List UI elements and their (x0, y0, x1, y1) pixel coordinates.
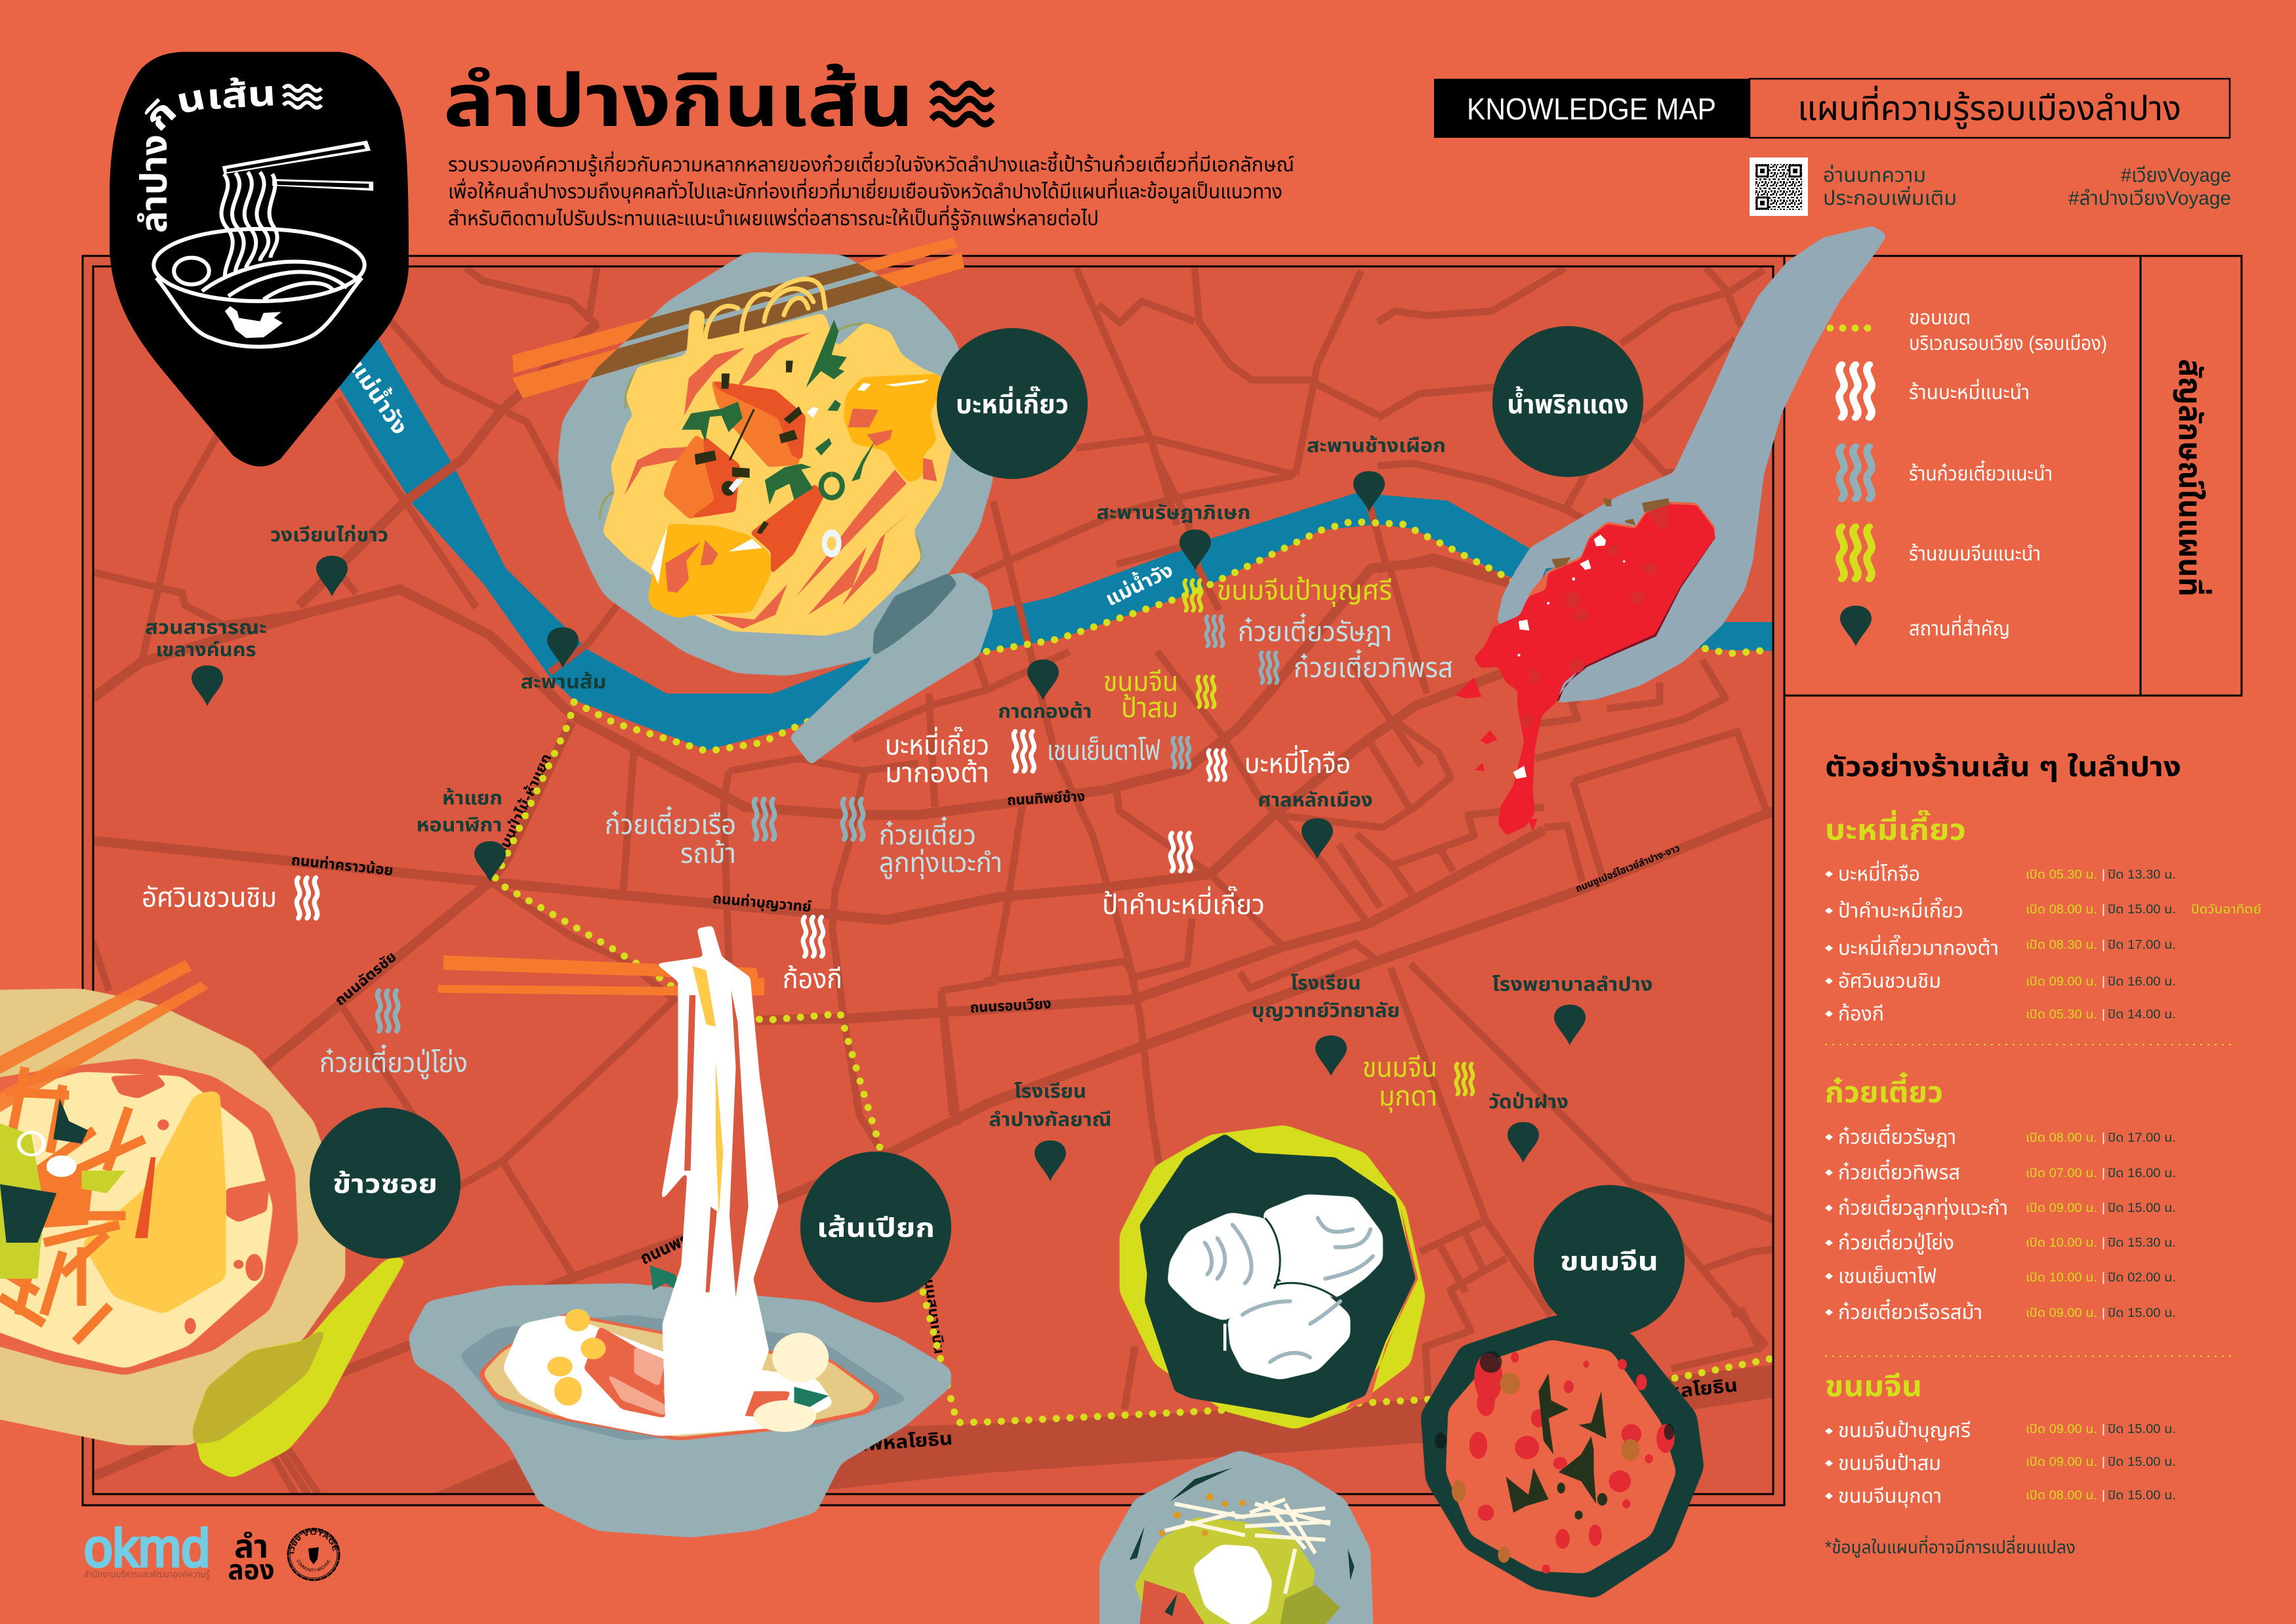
landmark: Wongwian Kai Khao (270, 525, 388, 596)
QR caption: ประกอบเพิ่มเติม (1823, 186, 1957, 209)
legend (1830, 307, 2107, 646)
list section: kuay tiew: ปิด 17.00 น. (2108, 1131, 2176, 1145)
circle: Mee Kiew (937, 328, 1088, 479)
legend: boundary: ขอบเขต (1909, 307, 1971, 329)
road names: ถนนป่าไม้-ห้าแยก (493, 751, 554, 859)
shop: Mukda (1363, 1052, 1473, 1113)
illustration: Mee Kiew bowl with chopsticks (512, 238, 993, 765)
list section: kuay tiew: ก๋วยเตี๋ยวทิพรส (1838, 1159, 1960, 1184)
list section: mee kiew: ปิด 14.00 น. (2108, 1008, 2176, 1022)
road names (291, 751, 1738, 1457)
legend: kuay tiew shops: ร้านก๋วยเตี๋ยวแนะนำ (1909, 460, 2053, 485)
shop: Kong Kee: ก้องกี (783, 963, 842, 994)
landmark: Lampang Kanlayanee school: ลำปางกัลยาณี (989, 1110, 1111, 1131)
list section: mee kiew (1825, 810, 2261, 1025)
list section: mee kiew: บะหมี่เกี๊ยว (1825, 810, 1966, 846)
road names: ถนนพหลโยธิน (827, 1428, 953, 1457)
logo: curved title part two: กินเส้น (144, 77, 273, 131)
hashtags: #ลำปางเวียงVoyage (2068, 188, 2231, 209)
logo: Wiang Voyage seal: เวียง VOYAGE (289, 1530, 338, 1554)
shop: Mukda: มุกดา (1379, 1081, 1437, 1113)
noodle strands (656, 925, 779, 1427)
river names: แม่น้ำวัง (345, 354, 416, 440)
intro paragraph: สำหรับติดตามไปรับประทานและแนะนำเผยแพร่ต่อสาธารณะให้เป็นที่รู้จักแพร่หลายต่อไป (448, 205, 1099, 230)
road names: ถนนทิพย์ช้าง (1007, 788, 1086, 808)
shop: Pa Kham (1102, 833, 1265, 920)
chopsticks (512, 238, 964, 398)
list section: mee kiew: บะหมี่โกจือ (1838, 860, 1920, 885)
road names: ถนนพหลโยธิน (1612, 1375, 1738, 1408)
bowl (408, 1265, 951, 1537)
shop: Pa Som: ขนมจีน (1103, 666, 1178, 697)
river names (345, 354, 1177, 610)
list section: kuay tiew: ปิด 15.00 น. (2108, 1201, 2176, 1215)
landmark: Ratsadaphisek bridge (1097, 503, 1250, 570)
noodle shops on map (142, 575, 1473, 1113)
roads: minor road network (92, 268, 1773, 1494)
road names: ถนนท่าคราวน้อย (291, 852, 394, 879)
road names: ถนนฉัตรชัย (331, 948, 400, 1009)
landmark: Khelang Nakhon park: สวนสาธารณะ (145, 617, 267, 638)
list section: kuay tiew: เปิด 10.00 น. (2026, 1271, 2097, 1285)
list section: kuay tiew: เปิด 07.00 น. (2026, 1167, 2097, 1180)
QR caption (1823, 165, 1957, 209)
landmark: Lampang Kanlayanee school (989, 1081, 1111, 1181)
list section: mee kiew: ป้าคำบะหมี่เกี๊ยว (1838, 897, 1963, 922)
logo: Wiang Voyage seal: COMMUNITY ARCHIVES (297, 1559, 331, 1572)
list section: kuay tiew: ก๋วยเตี๋ยวรัษฎา (1838, 1123, 1956, 1148)
legend: khanom jeen shops (1839, 526, 2041, 579)
shop: Ko Chue (1208, 745, 1351, 780)
intro paragraph: รวบรวมองค์ความรู้เกี่ยวกับความหลากหลายของก๋วยเตี๋ยวในจังหวัดลำปางและชี้เป้าร้านก๋วยเตี๋ยวที่มีเอกลักษณ์ (448, 151, 1294, 177)
landmark: Kad Kong Ta: กาดกองต้า (998, 701, 1092, 722)
landmark: Kad Kong Ta (998, 659, 1092, 722)
list section: khanom jeen (1825, 1371, 2176, 1508)
list section: kuay tiew: เปิด 10.00 น. (2026, 1236, 2097, 1250)
list section: mee kiew: ปิด 15.00 น. (2108, 903, 2176, 917)
bowl plate (558, 252, 993, 676)
list section: mee kiew: บะหมี่เกี๊ยวมากองต้า (1838, 934, 1999, 959)
list section: khanom jeen: | (2102, 1455, 2105, 1469)
landmark pins and names (145, 436, 1653, 1181)
list section: kuay tiew: | (2102, 1271, 2105, 1285)
list section: mee kiew: | (2102, 903, 2105, 917)
logo: Wiang Voyage seal (287, 1528, 340, 1581)
road names: ถนนสนามบิน (920, 1268, 948, 1355)
list section: kuay tiew: ปิด 02.00 น. (2108, 1271, 2176, 1285)
shop: boat noodles: ก๋วยเตี๋ยวเรือ (605, 806, 736, 840)
noodles and toppings (600, 310, 956, 636)
list section: kuay tiew: ปิด 16.00 น. (2108, 1167, 2176, 1180)
list section: mee kiew: ปิด 16.00 น. (2108, 975, 2176, 989)
shop: Mee Kiew Makongta: บะหมี่เกี๊ยว (885, 726, 989, 760)
road names: ถนนพระบาท (637, 1215, 722, 1268)
shop: boat noodles (605, 799, 775, 869)
legend: landmarks: สถานที่สำคัญ (1909, 615, 2010, 640)
list section: mee kiew: ก้องกี (1838, 1003, 1884, 1025)
category circles (310, 326, 1685, 1336)
shop: Pu Yong: ก๋วยเตี๋ยวปู่โย่ง (319, 1044, 468, 1079)
shop: Asawin: อัศวินชวนชิม (142, 882, 277, 913)
shop: Yen Ta Fo: เชนเย็นตาโฟ (1047, 735, 1160, 766)
landmark: clock tower junction: หอนาฬิกา (416, 815, 502, 836)
legend: kuay tiew shops (1839, 446, 2053, 499)
illustration: bottom bowl of khanom jeen (1099, 1449, 1376, 1624)
landmark: City pillar: ศาลหลักเมือง (1258, 790, 1372, 811)
shop: Asawin (142, 878, 318, 918)
list section: mee kiew: ปิด 17.00 น. (2108, 938, 2176, 952)
logo: noodle bowl line drawing (154, 140, 373, 346)
title: Lampang Kin Sen: ลำปางกินเส้น (443, 60, 914, 142)
illustration: Khanom Jeen red soup (1421, 1315, 1704, 1598)
panel: map area (83, 256, 1784, 1505)
noodle loops above the pile (705, 279, 825, 341)
road names: ถนนรอบเวียง (970, 995, 1052, 1016)
list section: khanom jeen: ขนมจีนป้าบุญศรี (1838, 1420, 1971, 1442)
landmark: Wat Pa Fang (1488, 1092, 1568, 1163)
list section: khanom jeen: เปิด 09.00 น. (2026, 1455, 2097, 1469)
shop: Look Thung (842, 799, 1002, 879)
logo pin: Lampang noodle badge (110, 52, 409, 467)
shop: Mee Kiew Makongta (885, 726, 1034, 788)
list section: mee kiew: เปิด 09.00 น. (2026, 975, 2097, 989)
list section: mee kiew: | (2102, 868, 2105, 882)
shop: Thipparos: ก๋วยเตี๋ยวทิพรส (1294, 649, 1453, 683)
list section: kuay tiew: | (2102, 1201, 2105, 1215)
landmark: Wongwian Kai Khao: วงเวียนไก่ขาว (270, 525, 388, 546)
intro paragraph: เพื่อให้คนลำปางรวมถึงบุคคลทั่วไปและนักท่องเที่ยวที่มาเยี่ยมเยือนจังหวัดลำปางได้มีแผนที่และข้อมูลเป็นแนวทาง (448, 178, 1282, 203)
hashtags: #เวียงVoyage (2121, 165, 2231, 186)
header badge: Knowledge Map: KNOWLEDGE MAP (1467, 92, 1716, 126)
list section: khanom jeen: ขนมจีน (1825, 1371, 1922, 1403)
list section: kuay tiew: | (2102, 1236, 2105, 1250)
list section: kuay tiew: เชนเย็นตาโฟ (1838, 1266, 1937, 1287)
list section: kuay tiew: | (2102, 1131, 2105, 1145)
footnote: *ข้อมูลในแผนที่อาจมีการเปลี่ยนแปลง (1825, 1535, 2076, 1558)
landmark: Lampang hospital: โรงพยาบาลลำปาง (1492, 974, 1653, 995)
list section: kuay tiew: เปิด 09.00 น. (2026, 1306, 2097, 1320)
spoon: grey over noodles (789, 572, 993, 765)
landmark: Boonyawat school (1252, 973, 1400, 1076)
landmark: Khelang Nakhon park (145, 617, 267, 706)
list section: khanom jeen: | (2102, 1423, 2105, 1436)
road names: ถนนท่าบุญวาทย์ (712, 890, 812, 916)
road: Phahonyothin highway (433, 1365, 1773, 1494)
logo: waves mark (283, 86, 321, 108)
list section: khanom jeen: ปิด 15.00 น. (2108, 1455, 2176, 1469)
landmark: Som bridge: สะพานส้ม (521, 672, 606, 693)
shop: Mee Kiew Makongta: มากองต้า (885, 757, 989, 788)
list section: mee kiew: เปิด 05.30 น. (2026, 1008, 2097, 1022)
landmark: White elephant bridge (1307, 436, 1446, 512)
river names: แม่น้ำวัง (1101, 556, 1177, 610)
landmark: Khelang Nakhon park: เขลางค์นคร (156, 640, 256, 661)
shop: Pa Som: ป้าสม (1121, 692, 1178, 723)
landmark: Ratsadaphisek bridge: สะพานรัษฎาภิเษก (1097, 503, 1250, 524)
panel: legend frame (1784, 256, 2242, 696)
shop: Pa Bunsri: ขนมจีนป้าบุญศรี (1217, 575, 1392, 607)
list section: kuay tiew: ก๋วยเตี๋ยวเรือรสม้า (1838, 1299, 1982, 1323)
legend: mee kiew shops: ร้านบะหมี่แนะนำ (1909, 379, 2030, 404)
list section: kuay tiew: | (2102, 1167, 2105, 1180)
QR caption: อ่านบทความ (1823, 165, 1926, 186)
landmark: White elephant bridge: สะพานช้างเผือก (1307, 436, 1446, 457)
spoon (1497, 226, 1887, 703)
list section: mee kiew: เปิด 08.00 น. (2026, 903, 2097, 917)
list section: kuay tiew: เปิด 09.00 น. (2026, 1201, 2097, 1215)
circle: Sen Piak (800, 1152, 951, 1302)
shop: Mukda: ขนมจีน (1363, 1052, 1437, 1083)
list section: mee kiew: เปิด 05.30 น. (2026, 868, 2097, 882)
frame: map border lines (83, 256, 1784, 1505)
panel: shop list (1825, 751, 2261, 1558)
logo: Lam Long: ลอง (228, 1554, 274, 1585)
list section: khanom jeen: เปิด 09.00 น. (2026, 1423, 2097, 1436)
list section: mee kiew: | (2102, 1008, 2105, 1022)
shop: Ratsada: ก๋วยเตี๋ยวรัษฎา (1238, 613, 1392, 647)
list section: kuay tiew: ปิด 15.30 น. (2108, 1236, 2176, 1250)
logo: Lam Long: ลำ (234, 1528, 268, 1565)
circle: Nam Prik Daeng (1492, 326, 1643, 477)
landmark: Lampang hospital (1492, 974, 1653, 1045)
landmark: Boonyawat school: บุญวาทย์วิทยาลัย (1252, 1001, 1400, 1022)
shop: Pa Som (1103, 666, 1214, 723)
list section: kuay tiew: ก๋วยเตี๋ยว (1825, 1072, 1943, 1109)
circle: Khao Soi: ข้าวซอย (333, 1169, 438, 1199)
circle: Khanom Jeen (1534, 1185, 1685, 1336)
QR code (1750, 157, 1808, 216)
circle: Nam Prik Daeng: น้ำพริกแดง (1507, 386, 1628, 419)
landmark: Som bridge (521, 627, 606, 693)
circle: Mee Kiew: บะหมี่เกี๊ยว (956, 386, 1069, 419)
chili paste (1455, 498, 1716, 835)
illustration: chili paste spoon (1455, 226, 1887, 835)
circle: Sen Piak: เส้นเปียก (817, 1213, 935, 1243)
illustration: Khanom Jeen noodle balls (1120, 1125, 1425, 1430)
river: Wang river (338, 338, 1773, 750)
legend: boundary (1830, 307, 2107, 354)
icon: title waves (932, 84, 993, 124)
intro paragraph (448, 151, 1294, 230)
landmark: clock tower junction (416, 788, 506, 882)
list section: khanom jeen: ปิด 15.00 น. (2108, 1423, 2176, 1436)
landmark: Wat Pa Fang: วัดป่าฝาง (1488, 1092, 1568, 1113)
shop: Pa Kham: ป้าคำบะหมี่เกี๊ยว (1102, 886, 1265, 920)
legend: landmarks (1840, 606, 2010, 646)
list section: kuay tiew (1825, 1072, 2176, 1323)
list section: kuay tiew: ปิด 15.00 น. (2108, 1306, 2176, 1320)
legend: khanom jeen shops: ร้านขนมจีนแนะนำ (1909, 543, 2041, 565)
list section: khanom jeen: ขนมจีนมุกดา (1838, 1486, 1942, 1508)
list section: khanom jeen: | (2102, 1489, 2105, 1503)
header badge: Knowledge Map: แผนที่ความรู้รอบเมืองลำปาง (1797, 85, 2181, 129)
list section: kuay tiew: ก๋วยเตี๋ยวลูกทุ่งแวะกำ (1838, 1194, 2008, 1220)
dotted boundary: around the old city (495, 522, 1773, 1423)
map: river, roads and road names (92, 268, 1773, 1494)
hashtags (2068, 165, 2231, 209)
list section: kuay tiew: เปิด 08.00 น. (2026, 1131, 2097, 1145)
landmark: Lampang Kanlayanee school: โรงเรียน (1014, 1081, 1086, 1102)
list heading: ตัวอย่างร้านเส้น ๆ ในลำปาง (1825, 751, 2181, 782)
logo: Lam Long (228, 1528, 274, 1585)
list section: mee kiew: ปิด 13.30 น. (2108, 868, 2176, 882)
shop: Pu Yong (319, 991, 468, 1079)
list section: khanom jeen: เปิด 08.00 น. (2026, 1489, 2097, 1503)
chopsticks: lifting noodles (438, 955, 764, 995)
list section: kuay tiew: | (2102, 1306, 2105, 1320)
circle: Khao Soi (310, 1108, 461, 1259)
list section: khanom jeen: ขนมจีนป้าสม (1838, 1453, 1941, 1474)
shop: Look Thung: ลูกทุ่งแวะกำ (879, 847, 1002, 879)
roads: major road network (92, 323, 1773, 1476)
circle: Khanom Jeen: ขนมจีน (1560, 1247, 1658, 1276)
list section: mee kiew: | (2102, 938, 2105, 952)
shop: Kong Kee (783, 917, 842, 994)
list section: mee kiew: เปิด 08.30 น. (2026, 938, 2097, 952)
logo: OKMD: สำนักงานบริหารและพัฒนาองค์ความรู้ (84, 1569, 211, 1580)
illustration: wet noodle bowl with lifted noodles (408, 925, 951, 1537)
shop: Ko Chue: บะหมี่โกจือ (1244, 745, 1351, 779)
logo: OKMD: okmd (84, 1518, 210, 1578)
legend: boundary: บริเวณรอบเวียง (รอบเมือง) (1909, 333, 2107, 354)
landmark: City pillar (1258, 790, 1372, 859)
logo: curved title part one: ลำปาง (133, 135, 174, 233)
list section: mee kiew: | (2102, 975, 2105, 989)
shop: boat noodles: รถม้า (680, 838, 736, 869)
landmark: Boonyawat school: โรงเรียน (1291, 973, 1361, 994)
legend: mee kiew shops (1839, 365, 2030, 417)
header badge: Knowledge Map (1434, 79, 2230, 138)
list section: kuay tiew: ก๋วยเตี๋ยวปู่โย่ง (1838, 1229, 1954, 1255)
road names: ถนนซูเปอร์ไฮเวย์ลำปาง-งาว (1574, 843, 1682, 895)
shop: Look Thung: ก๋วยเตี๋ยว (879, 816, 976, 850)
illustration: Khao Soi bowl (0, 960, 408, 1479)
legend title vertical: สัญลักษณ์ในแผนที่ (2172, 359, 2212, 596)
list section: mee kiew: ปิดวันอาทิตย์ (2191, 903, 2261, 917)
list section: khanom jeen: ปิด 15.00 น. (2108, 1489, 2176, 1503)
landmark: clock tower junction: ห้าแยก (442, 788, 502, 809)
list section: mee kiew: อัศวินชวนชิม (1838, 970, 1941, 992)
